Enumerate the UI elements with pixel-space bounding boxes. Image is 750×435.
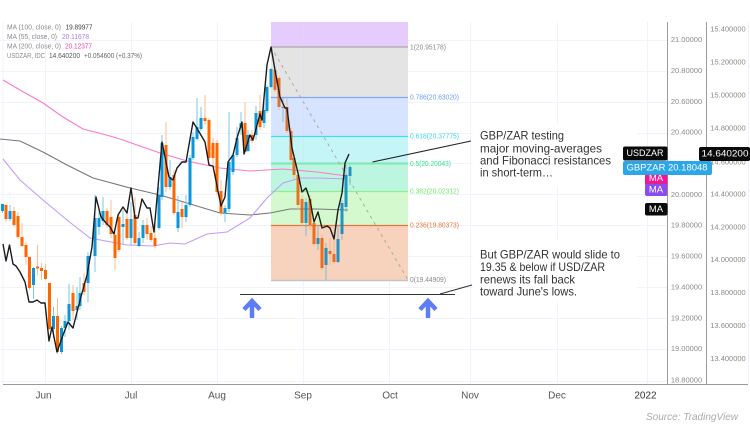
USDZAR price axis: 15.200000	[710, 57, 746, 66]
USDZAR price axis: 15.000000	[710, 90, 746, 99]
time axis labels: Sep	[294, 391, 312, 402]
GBPZAR price axis: 20.60000	[671, 97, 702, 106]
annotation leader line: resistance	[372, 141, 471, 162]
legend: MA (100, close, 0)	[7, 24, 61, 31]
legend: 19.89977	[66, 24, 93, 31]
tag: USDZAR price: 14.640200	[702, 149, 748, 160]
GBPZAR price axis: 20.40000	[671, 127, 702, 136]
GBPZAR price axis: 19.80000	[671, 220, 702, 229]
USDZAR price axis: 14.000000	[710, 255, 746, 264]
time axis labels	[35, 391, 657, 402]
GBPZAR price axis: 20.80000	[671, 66, 702, 75]
tag: MA pink	[645, 172, 668, 184]
GBPZAR candlesticks	[2, 68, 350, 354]
GBPZAR price axis	[671, 35, 702, 384]
callout: downside text: 19.35 & below if USD/ZAR	[480, 260, 605, 274]
GBPZAR price axis: 19.20000	[671, 313, 702, 322]
time axis labels: 2022	[634, 391, 657, 402]
annotation leader line: support	[240, 285, 472, 294]
callout: downside text: toward June's lows.	[480, 285, 577, 299]
tag: MA black	[645, 203, 668, 216]
legend: 14.640200	[49, 53, 80, 60]
time axis labels: Jul	[125, 391, 137, 402]
GBPZAR price axis: 20.00000	[671, 190, 702, 199]
GBPZAR price axis: 21.00000	[671, 35, 702, 44]
fibonacci level labels: 0.236(19.80373)	[410, 222, 459, 229]
legend: MA (200, close, 0)	[7, 43, 61, 50]
time axis labels: Dec	[548, 391, 566, 402]
legend: MA (55, close, 0)	[7, 34, 57, 41]
tag: USDZAR: USDZAR	[626, 148, 664, 159]
time axis labels: Nov	[461, 391, 479, 402]
tag: MA pink: MA	[649, 173, 664, 184]
callout: resistance text: and Fibonacci resistances	[480, 154, 611, 168]
tag: USDZAR price	[699, 147, 750, 161]
tag: MA purple: MA	[649, 185, 664, 196]
USDZAR price axis: 14.400000	[710, 189, 746, 198]
callout: resistance text	[480, 129, 611, 180]
USDZAR price axis: 13.400000	[710, 354, 746, 363]
icon: right up arrow	[420, 301, 436, 318]
fibonacci level labels: 0.786(20.63020)	[410, 94, 459, 101]
moving average 200 line	[3, 80, 347, 176]
GBPZAR price axis: 18.80000	[671, 375, 702, 384]
USDZAR price axis: 15.400000	[710, 24, 746, 33]
fibonacci level labels: 0.382(20.02312)	[410, 188, 459, 195]
USDZAR price axis: 14.800000	[710, 123, 746, 132]
fibonacci level labels: 0.5(20.20043)	[410, 161, 451, 168]
fibonacci level labels: 1(20.95178)	[410, 44, 446, 51]
moving average 100 line	[0, 139, 348, 215]
callout: downside text: renews its fall back	[480, 273, 576, 287]
time axis labels: Jun	[35, 391, 52, 402]
legend: 20.12377	[65, 43, 92, 50]
USDZAR black line	[3, 47, 349, 352]
GBPZAR price axis: 19.60000	[671, 251, 702, 260]
source credit: Source: TradingView	[646, 411, 739, 423]
callout: resistance text: GBP/ZAR testing	[480, 129, 564, 143]
GBPZAR price axis: 19.00000	[671, 344, 702, 353]
USDZAR price axis: 14.600000	[710, 157, 746, 166]
tag: GBPZAR price: GBPZAR 20.18048	[626, 163, 708, 174]
USDZAR price axis	[710, 24, 746, 363]
moving average 55 line	[3, 159, 347, 246]
fibonacci retracement zones	[271, 22, 408, 280]
time axis labels: Aug	[208, 391, 226, 402]
time axis labels: Oct	[382, 391, 398, 402]
tag: USDZAR	[623, 146, 668, 160]
legend: USDZAR, IDC	[7, 53, 45, 60]
callout: downside text: But GBP/ZAR would slide to	[480, 248, 620, 262]
fibonacci trend line	[271, 47, 408, 280]
USDZAR price axis: 13.800000	[710, 288, 746, 297]
callout: resistance text: major moving-averages	[480, 142, 602, 156]
legend: 20.11678	[62, 34, 89, 41]
USDZAR price axis: 14.200000	[710, 222, 746, 231]
USDZAR price axis: 13.600000	[710, 321, 746, 330]
fibonacci level labels: 0.618(20.37775)	[410, 133, 459, 140]
fibonacci level labels	[410, 44, 459, 284]
tag: MA purple	[645, 184, 668, 196]
callout: resistance text: in short-term…	[480, 166, 553, 180]
legend	[7, 24, 142, 60]
legend: +0.054600 (+0.37%)	[84, 53, 142, 60]
callout: downside text	[480, 248, 620, 299]
fibonacci level labels: 0(19.44909)	[410, 277, 446, 284]
icon: left up arrow	[244, 301, 260, 318]
GBPZAR price axis: 19.40000	[671, 282, 702, 291]
tag: MA black: MA	[649, 204, 664, 215]
